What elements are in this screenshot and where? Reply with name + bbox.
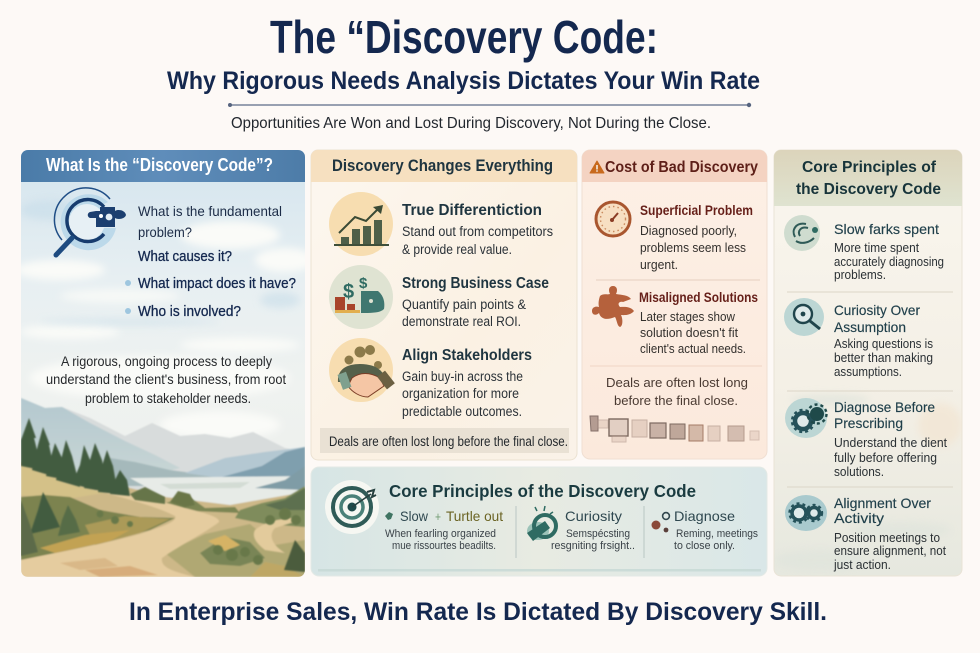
definition text — [46, 353, 286, 406]
icon: magnifier — [784, 298, 824, 336]
column: slow: When fearling organized — [385, 528, 496, 540]
item: superficial problem: problems seem less — [640, 240, 746, 255]
item: strong business case: Strong Business Case — [402, 275, 549, 292]
item: misaligned solutions: solution doesn't fit — [640, 325, 738, 340]
column: slow: mue rissourtes beadilts. — [392, 540, 496, 552]
principle: curiosity: assumptions. — [834, 365, 902, 379]
principle: alignment: Position meetings to — [834, 531, 940, 545]
principle: curiosity — [784, 298, 933, 379]
sidebar header: the Discovery Code — [796, 181, 941, 198]
panel header — [311, 150, 577, 182]
panel: core principles sidebar — [774, 150, 962, 576]
icon: puzzle piece — [592, 286, 634, 327]
question list: problem? — [138, 224, 192, 240]
principle: slow: More time spent — [834, 241, 919, 255]
icon: target — [325, 480, 379, 534]
column: curiosity: Curiosity — [565, 508, 622, 524]
subtitle: Why Rigorous Needs Analysis Dictates Your Win Rate — [167, 67, 760, 95]
icon: swirl — [784, 215, 820, 251]
callout bar — [320, 428, 569, 453]
principle: diagnose: solutions. — [834, 465, 884, 479]
principle: alignment: Alignment Over — [834, 495, 931, 511]
fading squares strip — [590, 416, 759, 442]
column: slow — [385, 508, 503, 552]
callout bar: Deals are often lost long before the final close. — [329, 434, 568, 449]
principle: alignment: Activity — [834, 510, 884, 526]
definition text: problem to stakeholder needs. — [85, 390, 251, 406]
icon: dollars and puzzle — [329, 265, 393, 329]
closing note: before the final close. — [614, 393, 738, 408]
icon: warning triangle — [590, 161, 604, 173]
panel header: What Is the “Discovery Code”? — [46, 155, 273, 175]
item: misaligned solutions — [592, 286, 758, 356]
column: diagnose — [652, 508, 758, 552]
principle: slow: problems. — [834, 268, 886, 282]
panel header — [21, 150, 305, 182]
icon: linked gears — [785, 495, 827, 531]
icon: dollars and puzzle: $ — [343, 281, 354, 303]
item: align stakeholders: organization for more — [402, 386, 519, 401]
column: slow: Slow — [400, 508, 429, 524]
definition text: A rigorous, ongoing process to deeply — [61, 353, 272, 369]
item: superficial problem — [596, 202, 753, 272]
principle: slow: accurately diagnosing — [834, 255, 944, 269]
item: align stakeholders: Align Stakeholders — [402, 347, 532, 364]
item: align stakeholders: Gain buy-in across the — [402, 369, 523, 384]
item: strong business case — [329, 265, 549, 329]
column: slow: + — [435, 509, 441, 524]
panel header: Discovery Changes Everything — [332, 156, 553, 175]
icon: gauge — [596, 202, 630, 236]
panel: core principles bottom strip — [311, 467, 767, 576]
column: curiosity: resgniting frsight.. — [551, 540, 635, 552]
principle: curiosity: Assumption — [834, 319, 906, 335]
principle: alignment — [785, 495, 946, 572]
title: The “Discovery Code: — [270, 11, 658, 63]
closing note: Deals are often lost long — [606, 375, 748, 390]
item: strong business case: demonstrate real ROI. — [402, 314, 521, 329]
item: true differentiation — [329, 192, 553, 257]
panel: discovery changes everything — [311, 150, 577, 460]
principle: diagnose — [785, 398, 948, 479]
item: align stakeholders: predictable outcomes. — [402, 404, 522, 419]
principle: slow — [784, 215, 944, 282]
item: misaligned solutions: Later stages show — [640, 309, 736, 324]
column: diagnose: to close only. — [674, 540, 735, 552]
footer statement: In Enterprise Sales, Win Rate Is Dictated By Discovery Skill. — [129, 598, 827, 626]
closing note — [606, 375, 748, 408]
principle: diagnose: fully before offering — [834, 451, 937, 465]
column: diagnose: Diagnose — [674, 508, 735, 524]
principle: diagnose: Diagnose Before — [834, 399, 935, 415]
icon: magnifier with puzzle piece — [54, 188, 126, 255]
panel header: Cost of Bad Discovery — [605, 159, 758, 176]
question list: Who is involved? — [138, 304, 241, 320]
principle: slow: Slow farks spent — [834, 221, 939, 237]
principle: alignment: ensure alignment, not — [834, 544, 946, 558]
item: misaligned solutions: client's actual needs. — [640, 341, 746, 356]
strip heading: Core Principles of the Discovery Code — [389, 481, 696, 501]
panel: what is the discovery code — [15, 150, 315, 577]
item: superficial problem: Superficial Problem — [640, 203, 753, 218]
icon: handshake and people — [329, 338, 395, 402]
panel: cost of bad discovery — [582, 150, 767, 459]
principle: curiosity: Asking questions is — [834, 337, 933, 351]
icon: dollars and puzzle: $ — [359, 275, 368, 292]
question list — [125, 203, 296, 320]
item: strong business case: Quantify pain points & — [402, 297, 526, 312]
item: true differentiation: & provide real value. — [402, 242, 512, 257]
column: curiosity: Semspécsting — [566, 528, 630, 540]
panel header — [582, 150, 767, 182]
icon: lightbulb spark — [527, 506, 556, 541]
principle: curiosity: Curiosity Over — [834, 302, 920, 318]
column: slow: Turtle out — [446, 508, 503, 524]
column: curiosity — [527, 506, 635, 552]
item: true differentiation: True Differentiction — [402, 202, 542, 219]
definition text: understand the client's business, from root — [46, 371, 286, 387]
question list: What causes it? — [138, 249, 232, 265]
column: diagnose: Reming, meetings — [676, 528, 758, 540]
item: superficial problem: urgent. — [640, 257, 678, 272]
item: superficial problem: Diagnosed poorly, — [640, 223, 737, 238]
principle: curiosity: better than making — [834, 351, 933, 365]
item: true differentiation: Stand out from competitors — [402, 224, 553, 239]
question list: What impact does it have? — [138, 276, 296, 292]
sidebar header — [774, 150, 962, 206]
sidebar header: Core Principles of — [802, 159, 937, 176]
question list: What is the fundamental — [138, 203, 282, 219]
title divider — [228, 103, 751, 107]
principle: diagnose: Prescribing — [834, 415, 903, 431]
tagline: Opportunities Are Won and Lost During Discovery, Not During the Close. — [231, 115, 711, 132]
principle: alignment: just action. — [833, 558, 891, 572]
landscape illustration — [21, 398, 305, 577]
item: align stakeholders — [329, 338, 532, 419]
principle: diagnose: Understand the dient — [834, 436, 948, 450]
item: misaligned solutions: Misaligned Solutions — [639, 290, 758, 305]
icon: growth chart — [329, 192, 393, 256]
icon: gears — [785, 398, 827, 438]
